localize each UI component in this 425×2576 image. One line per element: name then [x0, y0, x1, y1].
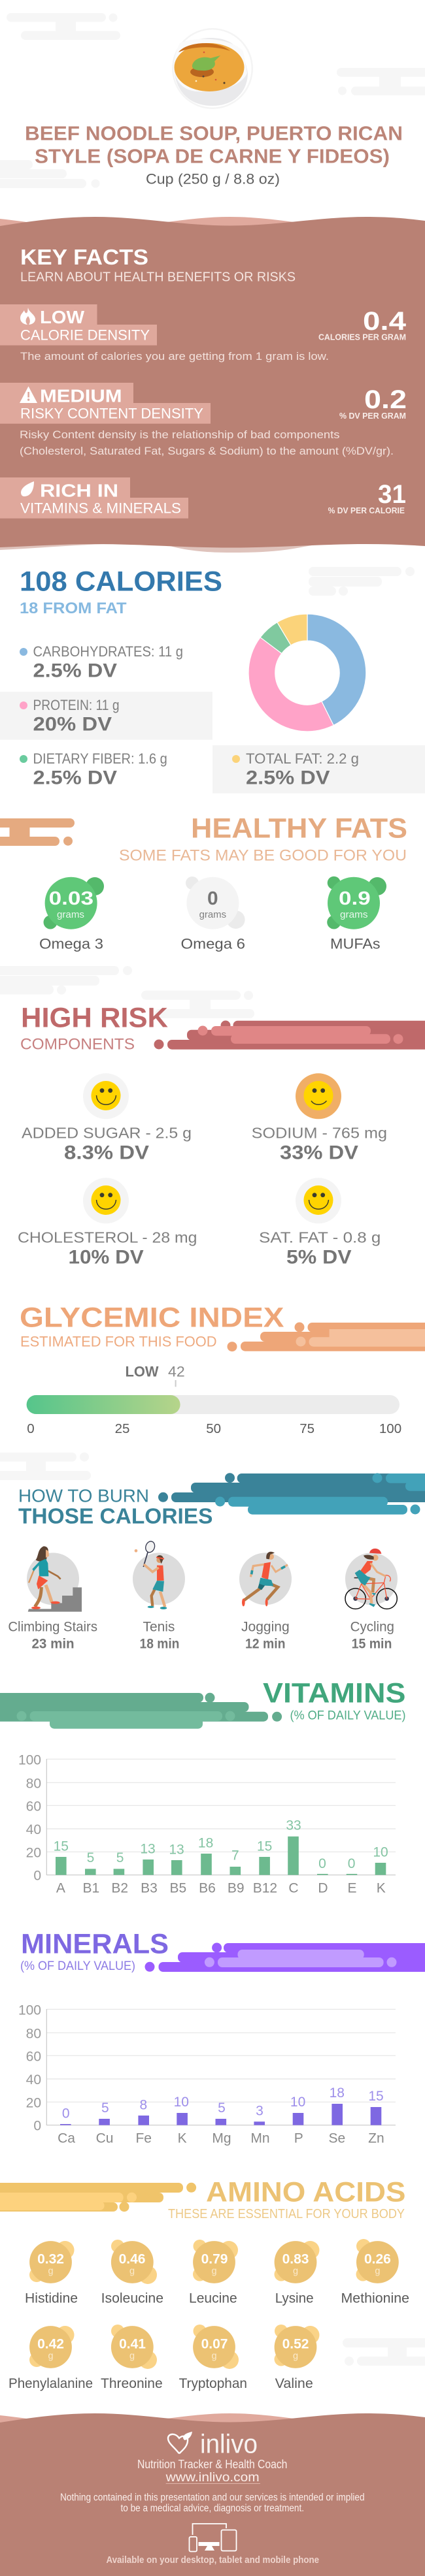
bar chart: minerals: 10	[174, 2095, 189, 2110]
fact: calorie density: CALORIES PER GRAM	[318, 332, 406, 342]
legend: total fat: TOTAL FAT: 2.2 g	[246, 750, 359, 767]
bar chart: minerals: Mg	[212, 2131, 231, 2146]
bar chart: vitamins: E	[347, 1880, 357, 1895]
activity: jogging	[239, 1552, 292, 1651]
legend: dietary fiber: DIETARY FIBER: 1.6 g	[33, 750, 167, 767]
amino: isoleucine	[101, 2240, 163, 2306]
amino: threonine: Threonine	[101, 2376, 163, 2391]
legend: carbohydrates	[20, 643, 183, 682]
amino: isoleucine: g	[129, 2266, 135, 2277]
amino: threonine	[101, 2325, 163, 2391]
amino: tryptophan: g	[211, 2351, 217, 2362]
amino acids heading: AMINO ACIDS	[206, 2177, 405, 2208]
bar chart: minerals: 3	[256, 2103, 264, 2118]
risk: saturated fat	[259, 1178, 381, 1268]
bar chart: minerals: K	[178, 2131, 187, 2146]
minerals decoration	[145, 1942, 425, 1972]
panel: key facts	[0, 217, 425, 553]
fact: rich in vitamins and minerals: VITAMINS & MINERALS	[20, 500, 181, 517]
amino: methionine: Methionine	[341, 2291, 409, 2306]
burn calories decoration	[158, 1473, 425, 1515]
amino: histidine: Histidine	[25, 2291, 78, 2306]
bar chart: minerals: Mn	[250, 2131, 270, 2146]
activity: climbing stairs: Climbing Stairs	[8, 1619, 97, 1634]
amino: leucine	[189, 2240, 238, 2306]
key facts subheading: LEARN ABOUT HEALTH BENEFITS OR RISKS	[20, 270, 296, 285]
bar chart: vitamins: B1	[82, 1880, 99, 1895]
activity: tennis: 18 min	[140, 1636, 179, 1651]
fact: risky content density: (Cholesterol, Saturated Fat, Sugars & Sodium) to the amount (%DV/gr).	[20, 445, 394, 457]
risk: cholesterol: CHOLESTEROL - 28 mg	[18, 1229, 197, 1246]
key facts heading: KEY FACTS	[20, 245, 148, 269]
amino: tryptophan: Tryptophan	[179, 2376, 247, 2391]
vitamins heading: VITAMINS	[263, 1678, 405, 1709]
amino: leucine: 0.79	[201, 2252, 228, 2267]
panel: footer	[0, 2413, 425, 2576]
amino: valine: g	[293, 2351, 298, 2362]
fat: omega 6	[180, 877, 245, 952]
bar chart: vitamins: B6	[199, 1880, 216, 1895]
amino: histidine: g	[48, 2266, 54, 2277]
healthy fats subheading: SOME FATS MAY BE GOOD FOR YOU	[119, 846, 407, 864]
title: BEEF NOODLE SOUP, PUERTO RICAN	[25, 121, 403, 144]
bar chart: minerals: 8	[139, 2097, 147, 2112]
amino acids decoration	[0, 2183, 196, 2212]
bar chart: vitamins: 13	[140, 1841, 156, 1856]
bar chart: minerals: Zn	[368, 2131, 384, 2146]
bar chart: vitamins: B3	[141, 1880, 158, 1895]
activity: climbing stairs: 23 min	[31, 1636, 75, 1651]
tagline: Nutrition Tracker & Health Coach	[137, 2458, 287, 2471]
logo wordmark: inlivo	[200, 2429, 258, 2459]
risk: added sugar: ADDED SUGAR - 2.5 g	[22, 1125, 192, 1142]
fat: MUFAs: grams	[340, 909, 367, 920]
bar chart: vitamins: B5	[169, 1880, 186, 1895]
title: STYLE (SOPA DE CARNE Y FIDEOS)	[35, 144, 390, 167]
activity: cycling: Cycling	[350, 1619, 394, 1634]
bar chart: vitamins: 80	[26, 1776, 41, 1791]
legend: dietary fiber	[20, 750, 167, 788]
legend: protein: PROTEIN: 11 g	[33, 697, 119, 713]
amino: leucine: Leucine	[189, 2291, 237, 2306]
vitamins subheading: (% OF DAILY VALUE)	[290, 1709, 405, 1723]
amino: isoleucine: 0.46	[119, 2252, 145, 2267]
amino: valine	[275, 2325, 319, 2391]
amino: threonine: g	[129, 2351, 135, 2362]
disclaimer	[60, 2492, 365, 2514]
fact: calorie density: CALORIE DENSITY	[20, 327, 150, 343]
risk: saturated fat: SAT. FAT - 0.8 g	[259, 1229, 381, 1246]
availability note: Available on your desktop, tablet and mobile phone	[106, 2555, 319, 2566]
legend: carbohydrates: 2.5% DV	[33, 660, 117, 682]
fact: calorie density: The amount of calories you are getting from 1 gram is low.	[20, 351, 329, 362]
amino: histidine	[25, 2241, 78, 2306]
bar chart: vitamins: 0	[318, 1856, 326, 1871]
bar chart: minerals: 20	[26, 2095, 41, 2110]
fact: calorie density	[0, 304, 407, 362]
amino: phenylalanine: Phenylalanine	[8, 2376, 93, 2391]
icon: devices	[190, 2524, 237, 2551]
glycemic index subheading: ESTIMATED FOR THIS FOOD	[20, 1334, 217, 1350]
activity: jogging: 12 min	[245, 1636, 285, 1651]
bar chart: minerals: 5	[101, 2101, 109, 2116]
bar chart: minerals: Fe	[135, 2131, 152, 2146]
amino: tryptophan: 0.07	[201, 2337, 228, 2352]
fat: MUFAs: 0.9	[339, 888, 371, 909]
legend: protein: 20% DV	[33, 713, 112, 735]
fat: omega 3	[39, 877, 104, 952]
bar chart: minerals: 40	[26, 2072, 41, 2087]
bar chart: minerals: 60	[26, 2049, 41, 2064]
macronutrient legend	[0, 643, 425, 794]
fat: omega 3: Omega 3	[39, 936, 103, 952]
bar chart: minerals: Ca	[58, 2131, 75, 2146]
burn calories heading: HOW TO BURN	[18, 1485, 149, 1505]
fact: risky content density: MEDIUM	[40, 386, 122, 406]
icon: warning triangle	[20, 387, 37, 403]
bar chart: vitamins: B9	[228, 1880, 245, 1895]
activity: tennis: Tenis	[143, 1619, 175, 1634]
bar chart: minerals	[18, 2003, 396, 2146]
fact: calorie density: 0.4	[363, 307, 407, 336]
fact: risky content density	[0, 383, 407, 457]
activity: cycling: 15 min	[352, 1636, 392, 1651]
amino: isoleucine: Isoleucine	[101, 2291, 163, 2306]
minerals heading: MINERALS	[21, 1929, 169, 1960]
fat: omega 3: grams	[57, 909, 84, 920]
glycemic index gauge: LOW	[126, 1364, 159, 1380]
bar chart: vitamins: 20	[26, 1845, 41, 1860]
glycemic index gauge	[27, 1364, 401, 1436]
activity: jogging: Jogging	[241, 1619, 290, 1634]
bar chart: minerals: Cu	[96, 2131, 113, 2146]
bar chart: minerals: 80	[26, 2026, 41, 2041]
risk: sodium	[252, 1073, 387, 1163]
glycemic index decoration	[228, 1322, 425, 1351]
bar chart: vitamins: 15	[257, 1839, 272, 1854]
bar chart: minerals: 0	[62, 2106, 70, 2121]
activity: climbing stairs	[8, 1546, 97, 1651]
fact: rich in vitamins and minerals: 31	[378, 480, 406, 509]
bar chart: minerals: Se	[328, 2131, 345, 2146]
bar chart: vitamins: 10	[373, 1844, 388, 1860]
fat: omega 3: 0.03	[49, 888, 94, 909]
risk: added sugar	[22, 1073, 192, 1163]
amino: phenylalanine: 0.42	[37, 2337, 64, 2352]
glycemic index heading: GLYCEMIC INDEX	[20, 1302, 284, 1334]
bar chart: minerals: 18	[330, 2085, 345, 2101]
amino: leucine: g	[211, 2266, 217, 2277]
glycemic index gauge: 0	[27, 1421, 35, 1436]
website link: www.inlivo.com	[165, 2471, 260, 2485]
legend: carbohydrates: CARBOHYDRATES: 11 g	[33, 643, 183, 660]
serving size: Cup (250 g / 8.8 oz)	[146, 171, 280, 187]
bar chart: vitamins: K	[377, 1880, 386, 1895]
burn calories heading	[18, 1485, 212, 1528]
bar chart: vitamins: 60	[26, 1799, 41, 1814]
bar chart: vitamins: B2	[111, 1880, 128, 1895]
burn calories heading: THOSE CALORIES	[18, 1504, 212, 1528]
amino: lysine	[275, 2241, 319, 2306]
minerals subheading: (% OF DAILY VALUE)	[20, 1959, 135, 1973]
bar chart: minerals: 15	[368, 2089, 384, 2104]
calories heading: 108 CALORIES	[20, 566, 222, 597]
amino: lysine: Lysine	[275, 2291, 314, 2306]
glycemic index gauge: 75	[299, 1421, 314, 1436]
risk: cholesterol: 10% DV	[68, 1246, 144, 1268]
bar chart: vitamins: A	[56, 1880, 65, 1895]
bar chart: vitamins: 15	[54, 1839, 69, 1854]
bar chart: vitamins	[18, 1752, 396, 1895]
healthy fats heading: HEALTHY FATS	[191, 813, 407, 845]
bar chart: vitamins: 0	[33, 1869, 41, 1884]
amino: lysine: g	[293, 2266, 298, 2277]
bar chart: vitamins: 40	[26, 1822, 41, 1837]
bar chart: vitamins: 0	[348, 1856, 355, 1871]
amino: lysine: 0.83	[282, 2252, 309, 2267]
risk: saturated fat: 5% DV	[286, 1246, 352, 1268]
legend: total fat	[232, 750, 359, 788]
bar chart: vitamins: 5	[116, 1850, 124, 1865]
bar chart: vitamins: 100	[18, 1752, 41, 1767]
bar chart: minerals: P	[294, 2131, 303, 2146]
fact: risky content density: Risky Content density is the relationship of bad components	[20, 429, 340, 441]
glycemic index gauge: 25	[115, 1421, 129, 1436]
bar chart: vitamins: D	[318, 1880, 328, 1895]
amino: phenylalanine: g	[48, 2351, 54, 2362]
risk: sodium: 33% DV	[280, 1142, 358, 1163]
high risk decoration	[154, 1020, 425, 1050]
amino: methionine: g	[375, 2266, 380, 2277]
bar chart: vitamins: C	[288, 1880, 299, 1895]
amino: methionine	[341, 2239, 409, 2306]
bar chart: vitamins: 33	[286, 1818, 301, 1833]
fat: omega 6: 0	[207, 888, 218, 909]
bar chart: minerals: 100	[18, 2003, 41, 2018]
glycemic index gauge: 42	[168, 1364, 185, 1380]
glycemic index gauge: 50	[206, 1421, 221, 1436]
amino: threonine: 0.41	[119, 2337, 146, 2352]
risk: sodium: SODIUM - 765 mg	[252, 1125, 387, 1142]
bar chart: vitamins: 18	[198, 1835, 213, 1850]
fact: risky content density: RISKY CONTENT DENSITY	[20, 406, 203, 422]
fat: MUFAs: MUFAs	[330, 936, 381, 952]
icon: leaf	[21, 481, 34, 496]
calories from fat: 18 FROM FAT	[20, 600, 127, 617]
title	[25, 121, 403, 167]
legend: total fat: 2.5% DV	[246, 767, 330, 788]
bar chart: minerals: 0	[33, 2119, 41, 2134]
high risk heading: HIGH RISK	[21, 1003, 168, 1034]
amino: histidine: 0.32	[37, 2252, 64, 2267]
icon: flame	[20, 308, 35, 325]
fact: risky content density: % DV PER GRAM	[339, 411, 406, 421]
logo: inlivo heart	[168, 2432, 192, 2453]
glycemic index gauge: 100	[379, 1421, 401, 1436]
amino: methionine: 0.26	[364, 2252, 391, 2267]
vitamins decoration	[0, 1693, 282, 1729]
high risk subheading: COMPONENTS	[20, 1036, 135, 1054]
activity: tennis	[133, 1540, 185, 1651]
legend: dietary fiber: 2.5% DV	[33, 767, 117, 788]
food photo: bowl of soup	[172, 28, 253, 109]
bar chart: minerals: 5	[218, 2101, 226, 2116]
bar chart: minerals: 10	[290, 2095, 305, 2110]
fact: rich in vitamins and minerals: % DV PER CALORIE	[328, 506, 405, 515]
bar chart: vitamins: 13	[169, 1842, 184, 1857]
donut chart	[248, 614, 366, 732]
legend: protein	[20, 697, 119, 735]
bar chart: vitamins: 7	[231, 1848, 239, 1863]
risk: cholesterol	[18, 1178, 197, 1268]
fact: calorie density: LOW	[40, 307, 84, 327]
fat: MUFAs	[327, 877, 386, 952]
disclaimer: Nothing contained in this presentation and our services is intended or implied	[60, 2492, 365, 2503]
activity: cycling	[345, 1549, 398, 1651]
amino: valine: 0.52	[282, 2337, 309, 2352]
fact: rich in vitamins and minerals: RICH IN	[40, 481, 118, 501]
bar chart: vitamins: 5	[87, 1850, 94, 1865]
fact: rich in vitamins and minerals	[0, 477, 406, 519]
amino: phenylalanine	[8, 2326, 93, 2391]
disclaimer: to be a medical advice, diagnosis or treatment.	[120, 2503, 304, 2514]
fat: omega 6: grams	[199, 909, 226, 920]
amino: tryptophan	[179, 2325, 247, 2391]
fact: risky content density: 0.2	[364, 385, 407, 414]
amino: valine: Valine	[275, 2376, 313, 2391]
risk: added sugar: 8.3% DV	[64, 1142, 149, 1163]
fat: omega 6: Omega 6	[180, 936, 245, 952]
healthy fats decoration	[0, 818, 75, 846]
amino acids subheading: THESE ARE ESSENTIAL FOR YOUR BODY	[168, 2207, 405, 2221]
bar chart: vitamins: B12	[253, 1880, 277, 1895]
